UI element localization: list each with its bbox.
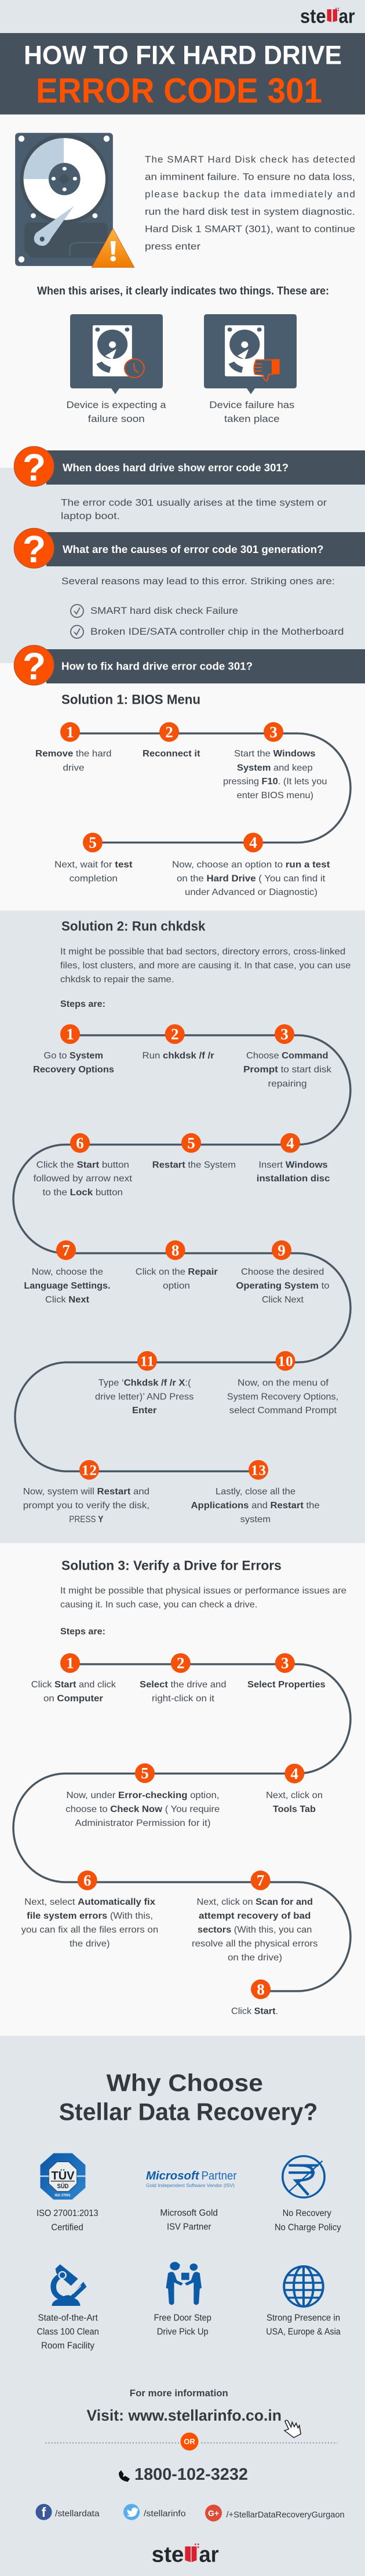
step 4: Tools Tab [273, 1804, 316, 1814]
panel: solution 1 [0, 645, 365, 911]
step 10: Now, on the menu of [238, 1378, 329, 1388]
step 11: Enter [132, 1406, 156, 1416]
step 5: completion [70, 874, 118, 883]
step 6: file system errors (With this, [27, 1911, 153, 1921]
step 7: Language Settings. [24, 1281, 111, 1291]
step 1 [35, 722, 111, 773]
divider with OR badge [45, 2432, 338, 2451]
step 3: Prompt to start disk [243, 1065, 332, 1075]
step 2: Run chkdsk /f /r [143, 1051, 214, 1061]
step 8: Click Start. [231, 2006, 278, 2016]
step 13: system [240, 1515, 271, 1525]
feature: ISO certification: SÜD [57, 2182, 69, 2190]
step 5: Administrator Permission for it) [75, 1818, 211, 1828]
step 2: 2 [171, 1025, 178, 1043]
step 6: 6 [83, 1872, 91, 1889]
step 6: Click the Start button [36, 1160, 129, 1170]
answer text: The error code 301 usually arises at the time system or [61, 497, 327, 508]
divider with OR badge: OR [184, 2437, 195, 2446]
heading: solution 2: Solution 2: Run chkdsk [61, 919, 206, 934]
feature: ISO certification [36, 2153, 98, 2233]
timeline path [70, 733, 351, 843]
step 12: Now, system will Restart and [23, 1487, 149, 1497]
step 6: followed by arrow next [34, 1174, 133, 1184]
feature: ISO certification: Certified [51, 2222, 83, 2233]
step 7: on the drive) [228, 1953, 282, 1963]
step 5: 5 [141, 1764, 149, 1782]
heading: solution 3: Solution 3: Verify a Drive for Errors [61, 1558, 282, 1573]
feature: Microsoft partner: ISV Partner [167, 2222, 211, 2232]
step 8 [231, 1980, 278, 2016]
step 4: under Advanced or Diagnostic) [185, 887, 317, 897]
description: It might be possible that bad sectors, directory errors, cross-linked [60, 947, 345, 957]
step 8: 8 [171, 1242, 179, 1259]
step 4: 4 [286, 1134, 294, 1152]
step 10: 10 [278, 1354, 293, 1369]
timeline path [13, 1035, 351, 1471]
step 4: 4 [249, 834, 257, 851]
heading: Stellar Data Recovery? [59, 2098, 317, 2125]
step 7: 7 [62, 1242, 70, 1259]
feature: Microsoft partner [146, 2170, 237, 2232]
feature: no recovery no charge [275, 2156, 341, 2233]
step 9 [236, 1240, 330, 1305]
social: facebook [36, 2504, 100, 2520]
social: facebook: /stellardata [55, 2509, 100, 2519]
step 7: attempt recovery of bad [199, 1911, 311, 1921]
step 1: on Computer [43, 1694, 103, 1704]
caption [209, 399, 294, 424]
step 6: the drive) [70, 1939, 110, 1949]
heading [59, 2069, 317, 2125]
icon: disk with clock [93, 325, 144, 377]
step 7: Click Next [45, 1295, 90, 1305]
step 5: choose to Check Now ( You require [65, 1804, 220, 1814]
feature: Microsoft partner: Microsoft [146, 2170, 200, 2182]
steps label: Steps are: [60, 999, 105, 1009]
caption: Device failure has [209, 399, 294, 410]
footer logo: stellar [152, 2542, 219, 2567]
step 3: 3 [281, 1654, 289, 1672]
feature: no recovery no charge: No Charge Policy [275, 2222, 341, 2233]
step 1 [31, 1653, 116, 1704]
step 3: Choose Command [246, 1051, 328, 1061]
step 10: System Recovery Options, [227, 1392, 338, 1402]
social: facebook: f [42, 2505, 46, 2520]
panel: introduction [0, 115, 365, 468]
footer logo: stellar: ar [199, 2542, 219, 2567]
step 1: 1 [66, 723, 74, 741]
feature: global presence: Strong Presence in [267, 2313, 340, 2323]
step 3 [247, 1653, 326, 1690]
step 9: 9 [278, 1242, 286, 1259]
website link: Visit: www.stellarinfo.co.in [87, 2407, 282, 2424]
step 2: Reconnect it [143, 749, 200, 759]
footer logo: stellar: ste [152, 2542, 184, 2567]
logo: stellar: ste [300, 6, 326, 28]
social: google plus: G+ [208, 2509, 219, 2518]
step 2: right-click on it [152, 1694, 215, 1704]
step 9: Click Next [262, 1295, 304, 1305]
heading bar: how to fix [14, 645, 365, 687]
step 6: 6 [76, 1134, 84, 1152]
step 3: System and keep [237, 763, 313, 773]
feature: no recovery no charge: No Recovery [283, 2208, 331, 2218]
step 8 [136, 1240, 218, 1291]
title line 2: ERROR CODE 301 [36, 71, 322, 110]
feature: global presence [266, 2266, 341, 2337]
feature: clean room: State-of-the-Art [38, 2313, 98, 2323]
step 4: Insert Windows [258, 1160, 328, 1170]
step 4 [257, 1133, 330, 1184]
feature: ISO certification: TÜV [51, 2169, 75, 2182]
step 5: 5 [89, 834, 97, 851]
step 7: 7 [257, 1872, 264, 1889]
intro paragraph: please backup the data immediately and [145, 188, 355, 199]
step 3: 3 [269, 723, 278, 741]
step 6: you can fix all the files errors on [21, 1925, 158, 1935]
steps label: Steps are: [60, 1627, 105, 1637]
phone number: 1800-102-3232 [134, 2465, 248, 2484]
step 13: Applications and Restart the [191, 1501, 320, 1511]
step 13: Lastly, close all the [216, 1487, 295, 1497]
step 9: Choose the desired [241, 1267, 324, 1277]
step 12: PRESS Y [69, 1515, 104, 1525]
step 8: 8 [257, 1981, 265, 1998]
description [60, 947, 351, 984]
step 13: 13 [251, 1463, 266, 1478]
heading bar: when does hard drive show error: When does hard drive show error code 301? [63, 462, 289, 474]
step 9: Operating System to [236, 1281, 330, 1291]
step 3: pressing F10. (It lets you [223, 777, 327, 787]
step 1: 1 [66, 1025, 74, 1043]
step 10: select Command Prompt [229, 1406, 337, 1416]
callout: failure expected [66, 314, 166, 424]
step 6: Next, select Automatically fix [24, 1897, 155, 1907]
step 3: 3 [280, 1025, 289, 1043]
step 13 [191, 1460, 320, 1525]
feature: clean room [37, 2264, 99, 2351]
step 7: sectors (With this, you can [198, 1925, 312, 1935]
step 7 [24, 1240, 111, 1305]
step 2: Select the drive and [140, 1680, 226, 1690]
step 1: Go to System [44, 1051, 103, 1061]
step 1: Click Start and click [31, 1680, 116, 1690]
intro paragraph: Hard Disk 1 SMART (301), want to continue [145, 223, 355, 234]
caption: Device is expecting a [66, 399, 166, 410]
heading: Why Choose [107, 2069, 263, 2096]
step 6: to the Lock button [43, 1188, 123, 1198]
step 7 [192, 1871, 317, 1963]
title line 1: HOW TO FIX HARD DRIVE [24, 41, 342, 70]
feature: door step pick up: Drive Pick Up [157, 2327, 209, 2337]
step 7: Now, choose the [32, 1267, 103, 1277]
intro paragraph: press enter [145, 241, 200, 252]
answer text: laptop boot. [61, 511, 120, 522]
step 7: resolve all the physical errors [192, 1939, 317, 1949]
answer text [61, 497, 327, 522]
description: It might be possible that physical issues or performance issues are [60, 1586, 346, 1596]
timeline path [13, 1664, 351, 1991]
feature: clean room: Class 100 Clean [37, 2327, 99, 2337]
step 1: Recovery Options [33, 1065, 114, 1075]
callout: failure has taken place [204, 314, 297, 424]
feature: door step pick up [154, 2262, 211, 2337]
step 2 [143, 1024, 214, 1061]
feature: Microsoft partner: Microsoft Gold [160, 2208, 218, 2218]
step 5: Restart the System [152, 1160, 236, 1170]
step 5 [152, 1133, 236, 1170]
heading bar: when does hard drive show error [14, 446, 365, 489]
description [60, 1586, 346, 1610]
step 5: Now, under Error-checking option, [66, 1791, 220, 1800]
description: files, lost clusters, and more are causing it. In that case, you can use [60, 961, 351, 971]
step 3: enter BIOS menu) [237, 791, 313, 801]
step 2 [143, 722, 200, 759]
heading bar: causes [14, 527, 365, 570]
header bar with logo [0, 0, 365, 34]
step 2 [140, 1653, 226, 1704]
caption: taken place [224, 413, 279, 424]
description: causing it. In such case, you can check a drive. [60, 1600, 257, 1610]
step 4: installation disc [257, 1174, 330, 1184]
list item: SMART failure: SMART hard disk check Failure [90, 605, 238, 616]
step 11: 11 [140, 1354, 154, 1369]
step 2: 2 [177, 1654, 185, 1672]
step 5: 5 [187, 1134, 195, 1152]
logo: stellar: ar [338, 6, 355, 28]
step 3: Start the Windows [234, 749, 316, 759]
step 12 [23, 1460, 149, 1525]
icon: hand cursor [284, 2420, 301, 2437]
panel: solution 3 [0, 1543, 365, 2036]
intro paragraph: run the hard disk test in system diagnostic. [145, 206, 355, 217]
description: chkdsk to repair the same. [60, 974, 174, 984]
step 3: repairing [268, 1079, 307, 1089]
step 4: 4 [291, 1765, 298, 1782]
social: google plus [205, 2505, 345, 2522]
caption: failure soon [88, 413, 145, 424]
heading bar: when does hard drive show error: ? [23, 446, 46, 489]
intro paragraph: The SMART Hard Disk check has detected [145, 154, 355, 165]
step 11: drive letter)’ AND Press [95, 1392, 194, 1402]
step 8: Click on the Repair [136, 1267, 218, 1277]
feature: Microsoft partner: Partner [202, 2170, 237, 2182]
step 5 [65, 1763, 220, 1828]
step 3 [223, 722, 327, 801]
step 1 [33, 1024, 114, 1075]
feature: Microsoft partner: Gold Independent Software Vendor (ISV) [146, 2183, 235, 2188]
step 1: Remove the hard [35, 749, 111, 759]
social: twitter: /stellarinfo [144, 2509, 186, 2519]
caption [66, 399, 166, 424]
step 4 [266, 1764, 323, 1814]
heading bar: causes: What are the causes of error code 301 generation? [63, 544, 323, 555]
intro paragraph: an imminent failure. To ensure no data loss, [145, 171, 355, 182]
step 1: drive [63, 763, 85, 773]
step 1: 1 [66, 1654, 74, 1672]
heading bar: causes: ? [23, 527, 46, 570]
feature: ISO certification: ISO 27001 [54, 2193, 71, 2197]
step 11: Type ‘Chkdsk /f /r X:( [98, 1378, 191, 1388]
subheading: two things: When this arises, it clearly indicates two things. These are: [37, 285, 329, 297]
panel: why choose stellar [0, 2036, 365, 2576]
step 12: 12 [82, 1463, 97, 1478]
step 4 [172, 832, 330, 897]
icon: disk with thumbs down [225, 325, 280, 381]
step 8: option [163, 1281, 190, 1291]
list item: broken controller: Broken IDE/SATA controller chip in the Motherboard [90, 626, 344, 637]
step 3 [243, 1024, 332, 1089]
social: google plus: /+StellarDataRecoveryGurgaon [226, 2510, 345, 2520]
step 6 [21, 1871, 158, 1949]
feature: door step pick up: Free Door Step [154, 2313, 211, 2323]
step 11 [95, 1351, 194, 1416]
step 12: prompt you to verify the disk, [23, 1501, 149, 1511]
logo: stellar [300, 6, 355, 28]
intro paragraph [145, 154, 355, 252]
step 4: Next, click on [266, 1791, 323, 1800]
heading: solution 1: Solution 1: BIOS Menu [61, 692, 200, 707]
icon: hard disk with warning triangle [15, 133, 134, 267]
step 10 [227, 1351, 338, 1416]
panel: solution 2 [0, 911, 365, 1543]
step 5 [54, 832, 133, 883]
causes intro: Several reasons may lead to this error. Striking ones are: [61, 576, 335, 587]
heading bar: how to fix: How to fix hard drive error code 301? [61, 661, 253, 672]
step 2: 2 [165, 723, 173, 741]
feature: global presence: USA, Europe & Asia [266, 2327, 341, 2337]
social: twitter [123, 2504, 186, 2520]
feature: clean room: Room Facility [41, 2341, 94, 2351]
feature: ISO certification: ISO 27001:2013 [36, 2208, 98, 2218]
step 4: on the Hard Drive ( You can find it [177, 874, 326, 883]
title banner [0, 33, 365, 115]
for more information: For more information [130, 2388, 228, 2399]
step 7: Next, click on Scan for and [197, 1897, 313, 1907]
step 3: Select Properties [247, 1680, 326, 1690]
step 4: Now, choose an option to run a test [172, 860, 330, 869]
heading bar: how to fix: ? [23, 645, 46, 687]
step 5: Next, wait for test [54, 860, 133, 869]
step 6 [34, 1133, 133, 1198]
panel: questions [0, 446, 365, 663]
